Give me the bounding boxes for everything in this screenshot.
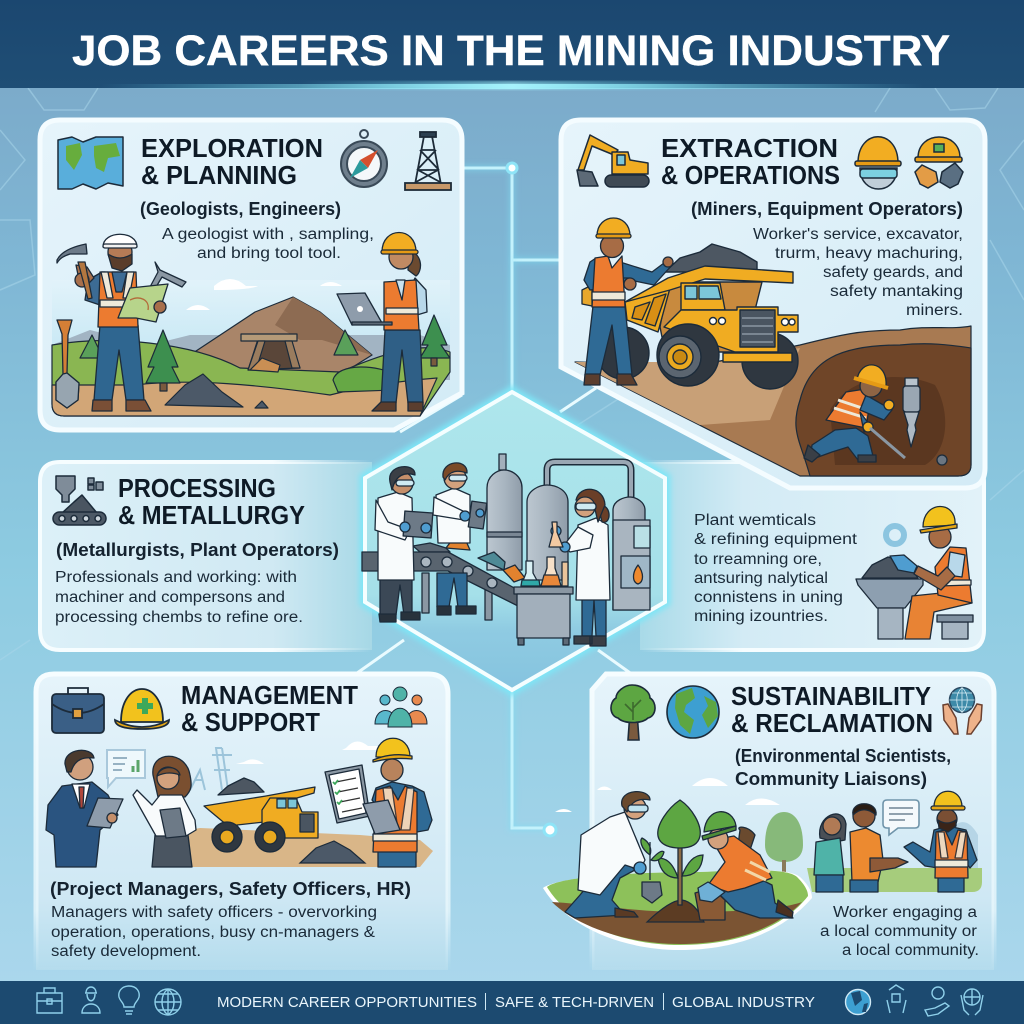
text: refining description: connistens in uning (694, 589, 843, 606)
heading: processing: & METALLURGY (118, 502, 305, 530)
footer icons right (846, 985, 983, 1016)
text: extraction description: safety geards, and (823, 264, 963, 281)
text: refining description: mining izountries. (694, 608, 828, 625)
figure: engineer with laptop (337, 232, 427, 411)
figure: miner with drill in pit (804, 365, 947, 465)
figure: plant operator at hopper (856, 506, 973, 639)
icon: compass (341, 130, 387, 187)
subheading: processing roles: (Metallurgists, Plant Operators) (56, 540, 339, 560)
text: refining description (694, 512, 858, 625)
icon: globe in hands (943, 688, 982, 734)
heading: sustainability (731, 683, 933, 738)
panel: sustainability and reclamation (543, 674, 994, 970)
icon: safety helmet and gloves (915, 137, 963, 188)
header banner (0, 0, 1024, 89)
icon: safety helmet with cross (115, 689, 169, 729)
text: processing description (55, 569, 303, 626)
heading: exploration (141, 135, 323, 190)
footer tagline (217, 993, 815, 1011)
text: sustainability description: Worker engaging a (833, 904, 977, 921)
heading: exploration: & PLANNING (141, 162, 297, 190)
footer icons left (37, 986, 181, 1015)
title: JOB CAREERS IN THE MINING INDUSTRY (72, 27, 950, 75)
text: sustainability description (820, 904, 979, 959)
figure: scientist planting (565, 792, 664, 918)
text: sustainability description: a local community or (820, 923, 977, 940)
figure: manager woman with folder (133, 756, 196, 867)
figure: technician with clipboard (433, 463, 487, 615)
heading: extraction: EXTRACTION (661, 135, 838, 163)
footer tagline: SAFE & TECH-DRIVEN (495, 995, 654, 1011)
figure: conveyor belt with ore (362, 540, 525, 620)
heading: processing (118, 475, 305, 530)
icon: speech bubble chart (107, 750, 145, 787)
figure: manager with tablet (46, 750, 123, 867)
icon: earth globe (667, 686, 719, 738)
text: processing description: processing chembs to refine ore. (55, 609, 303, 626)
heading: exploration: EXPLORATION (141, 135, 323, 163)
subheading: sustainability roles (735, 746, 951, 789)
text: extraction description: trurm, heavy machuring, (775, 245, 963, 262)
scene: mine site background (160, 741, 433, 867)
figure: volunteer planting (695, 812, 793, 920)
heading: management: & SUPPORT (181, 709, 320, 737)
text: extraction description: safety mantaking (830, 283, 963, 300)
figure: geologist with hammer and map (56, 234, 186, 411)
text: management description: safety development. (51, 943, 201, 960)
text: refining description: antsuring nalytical (694, 570, 828, 587)
icon: ore conveyor (53, 476, 106, 525)
heading: management (181, 682, 358, 737)
heading: extraction: & OPERATIONS (661, 162, 840, 190)
icon: drilling derrick (405, 132, 451, 190)
figure: technician with tablet (375, 467, 433, 622)
subheading: exploration roles: (Geologists, Engineers) (140, 199, 341, 219)
figure: process tanks and pipe (487, 454, 650, 610)
text: sustainability description: a local community. (842, 942, 979, 959)
icon: world map (58, 137, 123, 189)
figure: dump truck (204, 778, 318, 852)
text: extraction description: Worker's service, excavator, (753, 226, 963, 243)
heading: processing: PROCESSING (118, 475, 276, 503)
text: exploration description: and bring tool tool. (197, 245, 341, 262)
text: management description: Managers with safety officers - overvorking (51, 904, 377, 921)
icon: team (375, 687, 427, 727)
central hexagon: metallurgy lab (362, 392, 665, 690)
figure: chemist holding flask (549, 489, 610, 646)
subheading: sustainability roles: Community Liaisons) (735, 769, 927, 789)
text: refining description: to rreamning ore, (694, 551, 822, 568)
text: refining description: & refining equipment (694, 531, 858, 548)
text: extraction description (753, 226, 963, 319)
icon: briefcase (52, 688, 104, 733)
panel: exploration and planning (40, 120, 462, 430)
heading: sustainability: SUSTAINABILITY (731, 683, 931, 711)
figure: community member man (850, 804, 908, 892)
icon: excavator (577, 135, 649, 187)
text: exploration description (162, 226, 374, 262)
text: management description: operation, operations, busy cn-managers & (51, 924, 376, 941)
figure: miner by truck (582, 218, 673, 385)
scene: mine landscape (52, 279, 450, 416)
text: management description (51, 904, 377, 960)
footer bar (0, 981, 1024, 1024)
heading: extraction (661, 135, 840, 190)
panel: management and support (36, 674, 448, 970)
figure: site worker engaging community (904, 791, 977, 892)
figure: young tree (658, 800, 703, 905)
figure: safety officer with clipboard (325, 738, 432, 867)
subheading: sustainability roles: (Environmental Scientists, (735, 746, 951, 766)
text: processing description: Professionals and working: with (55, 569, 297, 586)
text: extraction description: miners. (906, 302, 963, 319)
subheading: management roles: (Project Managers, Safety Officers, HR) (50, 879, 411, 899)
text: exploration description: A geologist with , sampling, (162, 226, 374, 243)
icon: hard hat and goggles (855, 137, 901, 189)
subheading: extraction roles: (Miners, Equipment Operators) (691, 199, 963, 219)
icon: speech bubble (883, 800, 919, 835)
panel: extraction and operations (561, 120, 985, 488)
footer tagline: GLOBAL INDUSTRY (672, 995, 815, 1011)
text: processing description: machiner and compersons and (55, 589, 285, 606)
scene: haul road and pit (575, 326, 971, 476)
heading: management: MANAGEMENT (181, 682, 358, 710)
connector lines (350, 163, 640, 836)
figure: haul truck (597, 244, 798, 389)
text: refining description: Plant wemticals (694, 512, 816, 529)
footer tagline: MODERN CAREER OPPORTUNITIES (217, 995, 477, 1011)
heading: sustainability: & RECLAMATION (731, 710, 933, 738)
icon: tree (611, 685, 655, 740)
figure: community member woman (814, 814, 846, 892)
panel: processing and metallurgy (40, 462, 984, 650)
figure: lab table with flasks (514, 557, 573, 645)
scene: reclamation ground (543, 778, 982, 950)
